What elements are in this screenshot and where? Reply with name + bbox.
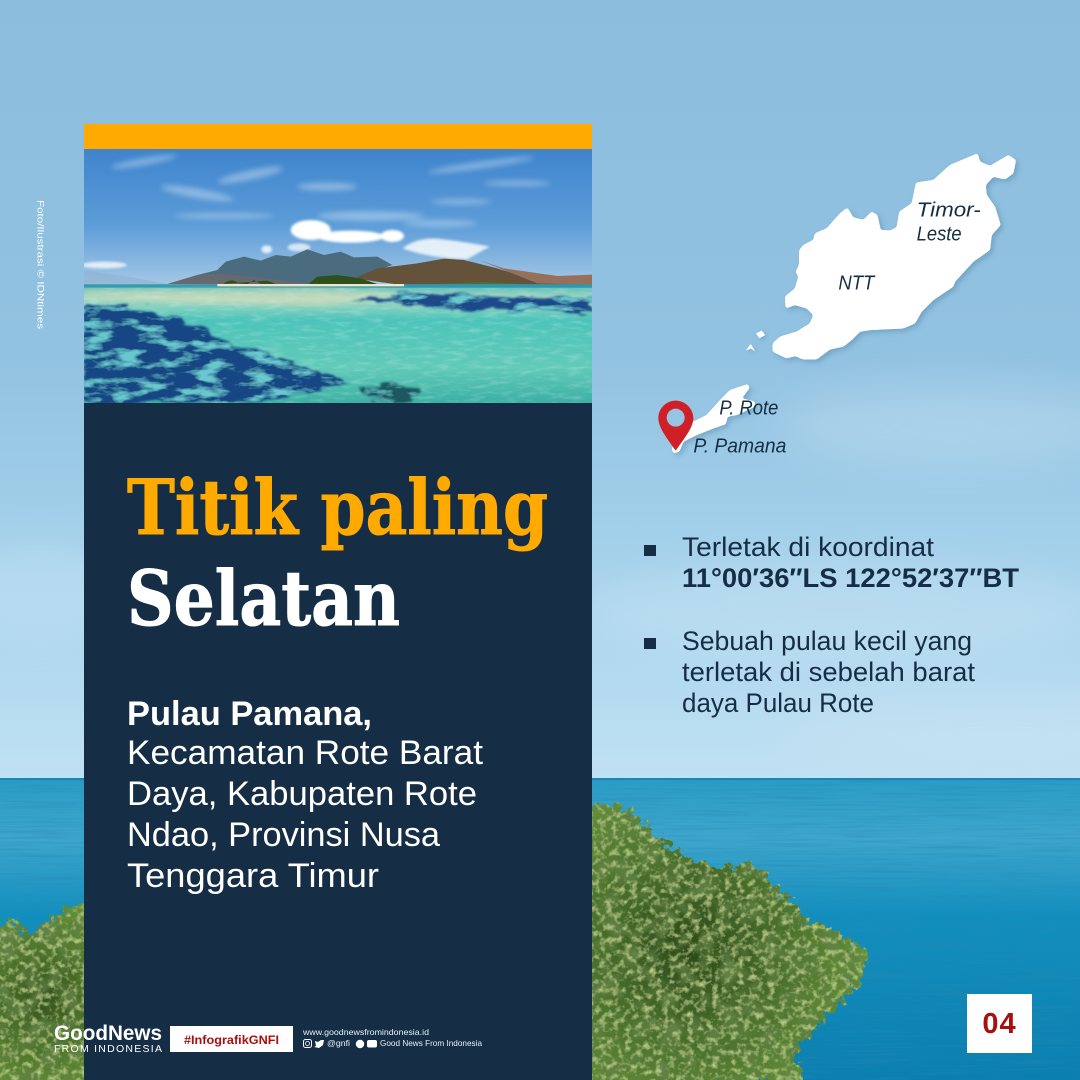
social links: @gnfi (327, 1038, 350, 1048)
logo: FROM INDONESIA (54, 1043, 162, 1055)
social links: Good News From Indonesia (380, 1038, 482, 1048)
photo: island and turquoise sea (84, 149, 592, 403)
photo credit: Foto/Ilustrasi © IDNtimes (34, 200, 46, 329)
map: Timor, Rote and Pamana (658, 154, 1020, 457)
hashtag: #InfografikGNFI (184, 1033, 279, 1047)
tree: right (585, 802, 868, 1080)
location description: Tenggara Timur (127, 857, 379, 895)
tree: left (0, 895, 95, 1080)
map: small islets (746, 331, 765, 351)
map: main island (773, 153, 1016, 359)
map pin (658, 401, 693, 451)
map labels: P. Rote (719, 397, 778, 419)
social links (302, 1027, 482, 1048)
location description: Ndao, Provinsi Nusa (127, 816, 440, 854)
location description: Pulau Pamana, (127, 695, 372, 733)
hill (354, 259, 592, 285)
social links: www.goodnewsfromindonesia.id (302, 1027, 429, 1037)
location description (127, 695, 484, 895)
bullet: description: daya Pulau Rote (682, 688, 874, 718)
reefs (84, 294, 592, 403)
bullet: coordinates (644, 532, 1020, 593)
location description: Daya, Kabupaten Rote (127, 775, 477, 813)
bullet: description (644, 626, 975, 718)
map labels: NTT (838, 273, 876, 295)
orange top bar (84, 124, 592, 149)
map: Rote island (672, 384, 755, 453)
location description: Kecamatan Rote Barat (127, 734, 484, 772)
heading (127, 463, 548, 643)
logo (54, 1022, 162, 1055)
map labels: Leste (917, 224, 962, 246)
map labels (693, 200, 981, 457)
map labels: P. Pamana (693, 435, 786, 457)
bullet: description: terletak di sebelah barat (682, 657, 975, 687)
page number (967, 994, 1032, 1053)
bullet: coordinates: 11°00′36″LS 122°52′37″BT (682, 563, 1020, 593)
page number: 04 (982, 1008, 1017, 1040)
bullet: coordinates: Terletak di koordinat (682, 532, 935, 562)
bullet: description: Sebuah pulau kecil yang (682, 626, 972, 656)
hashtag (170, 1026, 293, 1052)
heading line 2: Selatan (127, 554, 400, 643)
mountain (167, 249, 392, 285)
footer: logo, hashtag and social (54, 1022, 482, 1055)
panel: main card (84, 403, 592, 1080)
water (84, 284, 592, 403)
map labels: Timor- (917, 200, 981, 222)
logo: GoodNews (54, 1022, 162, 1045)
bullet list (644, 532, 1020, 718)
